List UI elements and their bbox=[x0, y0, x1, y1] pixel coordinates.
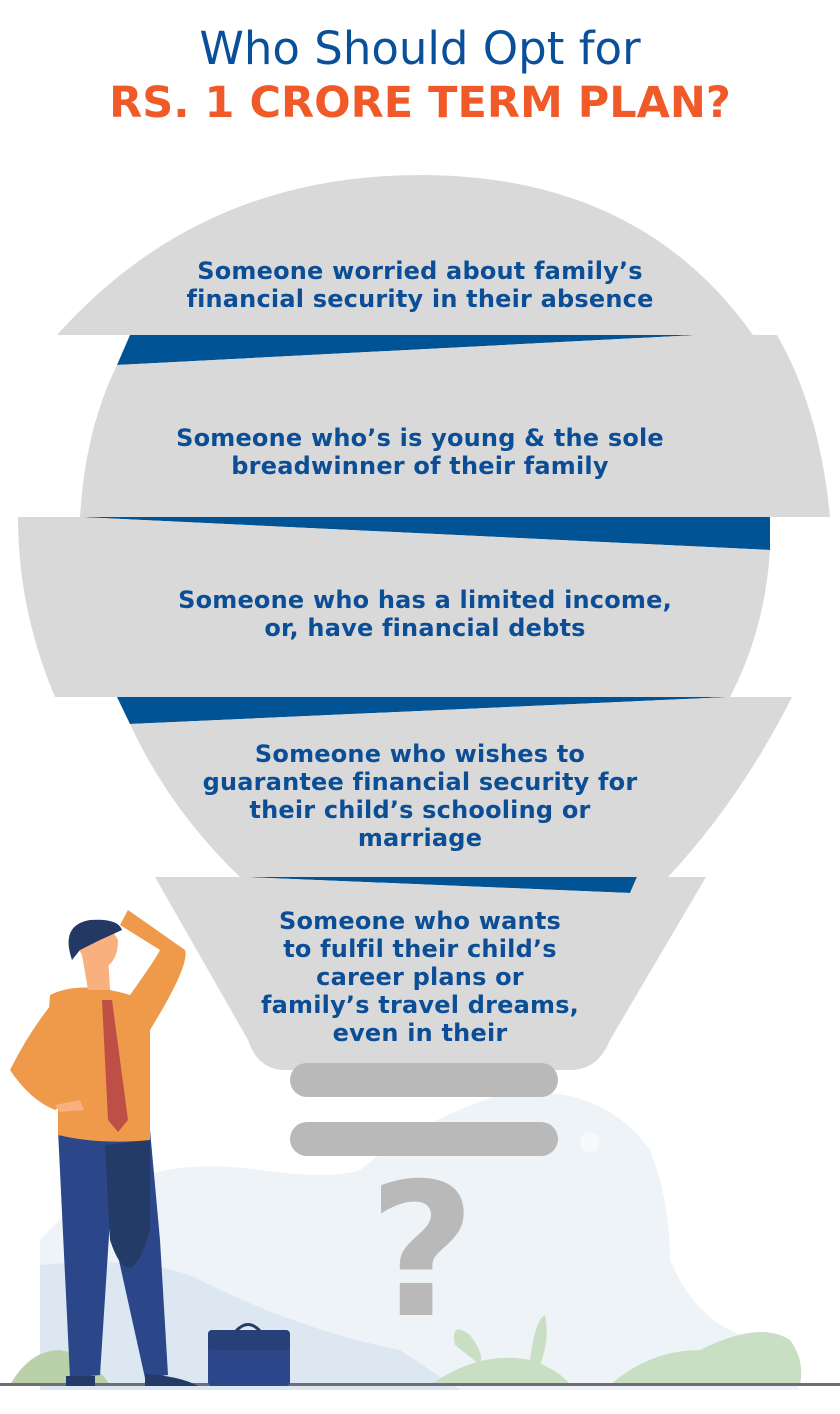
text 1: Someone worried about family’s bbox=[197, 257, 643, 285]
question mark: ? bbox=[368, 1143, 476, 1359]
text 5: even in their bbox=[333, 1019, 507, 1047]
text 5: Someone who wants bbox=[279, 907, 561, 935]
text 3: Someone who has a limited income, bbox=[178, 586, 672, 614]
text 1: financial security in their absence bbox=[186, 285, 654, 313]
band 3 bbox=[117, 697, 730, 724]
text 4: marriage bbox=[358, 824, 482, 852]
segment 2 bbox=[80, 335, 830, 517]
text 3 bbox=[178, 586, 672, 642]
title bbox=[109, 22, 731, 128]
title: Who Should Opt for bbox=[199, 22, 641, 75]
text 5: career plans or bbox=[316, 963, 524, 991]
band 4 bbox=[245, 877, 637, 893]
segment 5 bbox=[155, 877, 706, 1070]
briefcase bbox=[208, 1324, 290, 1386]
text 4 bbox=[203, 740, 638, 852]
segment 3 bbox=[18, 517, 770, 697]
man bbox=[10, 910, 198, 1386]
segment 4 bbox=[130, 697, 792, 877]
text 5: to fulfil their child’s bbox=[283, 935, 557, 963]
text 3: or, have financial debts bbox=[264, 614, 586, 642]
text 5: family’s travel dreams, bbox=[261, 991, 579, 1019]
text 4: guarantee financial security for bbox=[203, 768, 637, 796]
band 1 bbox=[117, 335, 697, 365]
bulb bars bbox=[290, 1063, 558, 1156]
text 1 bbox=[186, 257, 654, 313]
text 2: Someone who’s is young & the sole bbox=[176, 424, 664, 452]
ground line bbox=[0, 1383, 840, 1386]
text 4: Someone who wishes to bbox=[255, 740, 585, 768]
text 5 bbox=[261, 907, 579, 1047]
text 2 bbox=[176, 424, 664, 480]
band 2 bbox=[80, 517, 770, 550]
title: RS. 1 CRORE TERM PLAN? bbox=[109, 78, 731, 128]
segment 1 bbox=[57, 175, 753, 335]
background hills bbox=[10, 1092, 801, 1390]
text 4: their child’s schooling or bbox=[249, 796, 591, 824]
text 2: breadwinner of their family bbox=[231, 452, 609, 480]
